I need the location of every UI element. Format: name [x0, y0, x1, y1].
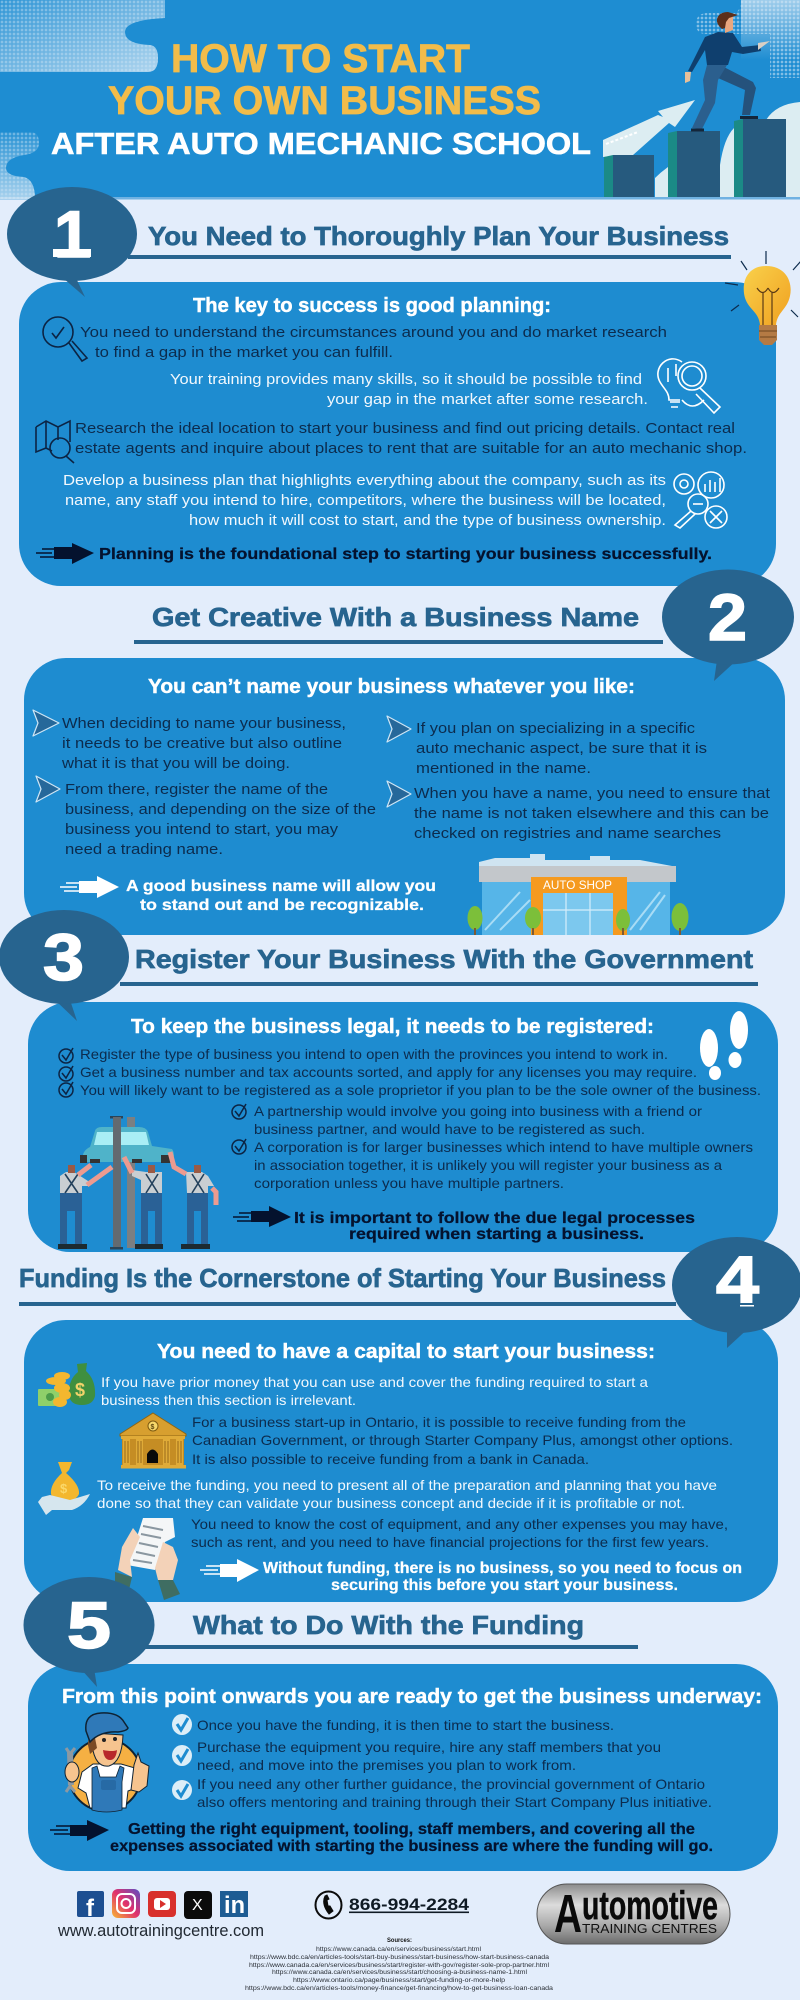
text: corporation: in association together, it is unlikely you will register your business as a	[254, 1157, 722, 1173]
icon: money pile	[38, 1363, 95, 1407]
checklist: Register the type of business you intend to open with the provinces you intend to work in.	[80, 1046, 668, 1062]
section heading 2	[134, 602, 663, 644]
text: present planning: done so that they can validate your business concept and decide if it is profitable or not.	[97, 1495, 685, 1511]
check list: also offers mentoring and training through their Start Company Plus initiative.	[197, 1794, 712, 1810]
text: name searches: the name is not taken elsewhere and this can be	[414, 805, 769, 822]
icon: linkedin: in	[224, 1892, 245, 1919]
text: specializing: auto mechanic aspect, be sure that it is	[416, 740, 707, 757]
section heading 4	[19, 1263, 676, 1306]
icon: map with magnifier	[36, 421, 74, 463]
check list	[197, 1717, 712, 1810]
icon: footprints	[700, 1011, 748, 1080]
text: prior money	[101, 1374, 648, 1408]
sources: Sources:	[387, 1937, 412, 1944]
section 3	[0, 910, 778, 1252]
section heading 4: Funding Is the Cornerstone of Starting Your Business	[19, 1263, 666, 1293]
text: cost of equipment: such as rent, and you need to have financial projections for the first few years.	[191, 1534, 709, 1550]
number bubble 4	[672, 1237, 800, 1348]
check list: need, and move into the premises you plan to work from.	[197, 1757, 576, 1773]
number bubble 2: 2	[708, 580, 747, 654]
logo: Automotive Training Centres	[537, 1884, 730, 1944]
takeaway: securing this before you start your business.	[331, 1577, 678, 1594]
social icons	[77, 1889, 248, 1922]
icon: money pile: $	[75, 1380, 85, 1400]
text: register the name	[65, 781, 376, 858]
text: location: Research the ideal location to start your business and find out pricing details. Contact real	[75, 420, 735, 437]
sources: https://www.bdc.ca/en/articles-tools/money-finance/get-financing/how-to-get-business-loan-canada	[245, 1985, 553, 1992]
text: training: your gap in the market after some research.	[327, 391, 648, 408]
title: HOW TO START	[171, 37, 470, 81]
sources: https://www.canada.ca/en/services/business/start/register-with-gov/register-sole-prop-partner.html	[249, 1962, 550, 1969]
takeaway	[263, 1560, 742, 1594]
illustration: man climbing bar chart	[603, 12, 800, 197]
text: present planning	[97, 1477, 717, 1511]
icon: facebook: f	[86, 1895, 95, 1922]
phone: 866-994-2284	[349, 1895, 470, 1914]
checklist	[80, 1046, 761, 1098]
text: cost of equipment	[191, 1516, 728, 1550]
icon: chevron bullets	[33, 710, 411, 807]
icon: phone	[316, 1892, 342, 1918]
panel 4	[24, 1320, 778, 1602]
panel 3	[28, 1002, 778, 1252]
illustration: auto shop	[468, 854, 688, 935]
footer	[57, 1884, 730, 1992]
text: specializing: mentioned in the name.	[416, 760, 591, 777]
number bubble 5	[24, 1577, 154, 1687]
takeaway	[126, 878, 436, 914]
title: AFTER AUTO MECHANIC SCHOOL	[51, 126, 591, 161]
icon: magnifier with check	[43, 317, 87, 361]
illustration: mechanics under lifted car	[58, 1116, 216, 1250]
text: business plan	[63, 472, 666, 529]
text: business plan: name, any staff you intend to hire, competitors, where the business will be located,	[65, 492, 666, 509]
text: partnership	[254, 1103, 702, 1137]
text: cost of equipment: You need to know the cost of equipment, and any other expenses you may have,	[191, 1516, 728, 1532]
panel heading: You need to have a capital to start your business:	[157, 1341, 655, 1363]
text: specializing	[416, 720, 707, 777]
icon: facebook	[77, 1891, 104, 1922]
section 4	[19, 1237, 800, 1602]
check list: Once you have the funding, it is then time to start the business.	[197, 1717, 614, 1733]
title	[51, 37, 591, 161]
text: Ontario funding: Canadian Government, or through Starter Company Plus, amongst other options.	[192, 1432, 733, 1448]
text: be creative: it needs to be creative but also outline	[62, 735, 342, 752]
takeaway: to stand out and be recognizable.	[140, 897, 424, 914]
icon: analytics cluster	[674, 472, 727, 528]
text: training	[170, 371, 648, 408]
sources: https://www.canada.ca/en/services/business/start/choosing-a-business-name-1.html	[272, 1969, 528, 1976]
takeaway: Planning is the foundational step to starting your business successfully.	[99, 546, 712, 563]
text: register the name: business, and depending on the size of the	[65, 801, 376, 818]
number bubble 3: 3	[43, 920, 84, 994]
sources	[245, 1937, 553, 1992]
number bubble 3	[0, 910, 129, 1021]
checklist: You will likely want to be registered as a sole proprietor if you plan to be the sole owner of the business.	[80, 1082, 761, 1098]
logo: Automotive Training Centres: TRAINING CENTRES	[582, 1921, 717, 1936]
panel heading: You can’t name your business whatever you like:	[148, 676, 635, 698]
section heading 3: Register Your Business With the Government	[135, 944, 753, 974]
text: present planning: To receive the funding, you need to present all of the preparation and planning that you have	[97, 1477, 717, 1493]
text: market research: to find a gap in the market you can fulfill.	[95, 344, 393, 361]
icon: black speed arrow	[233, 1206, 291, 1227]
takeaway: It is important to follow the due legal processes	[294, 1210, 695, 1227]
text: Ontario funding	[192, 1414, 733, 1467]
text: register the name: business you intend to start, you may	[65, 821, 339, 838]
illustration: cheerful mechanic	[65, 1713, 149, 1812]
check list: If you need any other further guidance, the provincial government of Ontario	[197, 1776, 705, 1792]
takeaway: A good business name will allow you	[126, 878, 436, 895]
takeaway: required when starting a business.	[349, 1226, 644, 1243]
checklist: Get a business number and tax accounts sorted, and apply for any licenses you may require.	[80, 1064, 697, 1080]
text: prior money: If you have prior money that you can use and cover the funding required to start a	[101, 1374, 648, 1390]
icon: black speed arrow	[36, 543, 94, 564]
icon: money bag in hand: $	[60, 1481, 68, 1496]
sources: https://www.canada.ca/en/services/business/start.html	[316, 1946, 482, 1953]
text: prior money: business then this section is irrelevant.	[101, 1392, 356, 1408]
icon: bank building	[120, 1413, 186, 1468]
panel heading: The key to success is good planning:	[193, 295, 551, 317]
number bubble 1	[7, 187, 137, 297]
icon: black speed arrow	[50, 1820, 109, 1841]
illustration: auto shop: AUTO SHOP	[543, 878, 612, 892]
sources: https://www.ontario.ca/page/business/start/get-funding-or-more-help	[293, 1977, 505, 1984]
text: corporation: A corporation is for larger businesses which intend to have multiple owners	[254, 1139, 753, 1155]
text: market research	[80, 324, 667, 361]
text: corporation: corporation unless you have multiple partners.	[254, 1175, 564, 1191]
section heading 1: You Need to Thoroughly Plan Your Business	[148, 221, 729, 251]
icon: white speed arrow	[60, 876, 119, 898]
icon: bank building: $	[150, 1424, 154, 1431]
logo: Automotive Training Centres: utomotive	[582, 1884, 718, 1928]
icon: X: X	[192, 1897, 203, 1914]
icon: glowing light bulb	[725, 251, 800, 345]
text: name searches	[414, 785, 771, 842]
number bubble 5: 5	[67, 1588, 111, 1662]
takeaway: Getting the right equipment, tooling, staff members, and covering all the	[128, 1821, 695, 1838]
section heading 2: Get Creative With a Business Name	[152, 602, 639, 632]
takeaway	[110, 1821, 713, 1855]
text: Ontario funding: For a business start-up in Ontario, it is possible to receive funding from the	[192, 1414, 686, 1430]
text: Ontario funding: It is also possible to receive funding from a bank in Canada.	[192, 1451, 589, 1467]
icon: instagram	[112, 1889, 140, 1918]
phone	[316, 1892, 470, 1918]
section heading 5	[145, 1610, 638, 1649]
number bubble 4: 4	[716, 1242, 759, 1316]
sources: https://www.bdc.ca/en/articles-tools/start-buy-business/start-business/how-start-business-canada	[250, 1954, 549, 1961]
text: location	[75, 420, 747, 457]
icon: youtube	[148, 1891, 176, 1917]
website: www.autotrainingcentre.com	[57, 1921, 264, 1940]
section 1	[7, 187, 800, 586]
section 5	[24, 1577, 778, 1871]
text: partnership: business partner, and would have to be registered as such.	[254, 1121, 645, 1137]
section heading 3	[120, 944, 758, 986]
text: business plan: how much it will cost to start, and the type of business ownership.	[189, 512, 666, 529]
panel 5	[28, 1664, 778, 1871]
number bubble 2	[662, 570, 794, 681]
text: partnership: A partnership would involve you going into business with a friend or	[254, 1103, 702, 1119]
text: corporation	[254, 1139, 753, 1191]
takeaway: Without funding, there is no business, so you need to focus on	[263, 1560, 742, 1577]
text: register the name: need a trading name.	[65, 841, 223, 858]
icon: money bag in hand	[38, 1462, 90, 1515]
text: training: Your training provides many skills, so it should be possible to find	[170, 371, 642, 388]
text: name searches: When you have a name, you need to ensure that	[414, 785, 771, 802]
text: location: estate agents and inquire about places to rent that are suitable for an auto mechanic shop.	[75, 440, 747, 457]
text: be creative: When deciding to name your business,	[62, 715, 346, 732]
panel 1	[19, 282, 776, 586]
header banner	[0, 0, 800, 200]
section heading 5: What to Do With the Funding	[193, 1610, 584, 1640]
icon: X	[184, 1891, 212, 1919]
icon: white speed arrow	[200, 1559, 259, 1582]
text: business plan: Develop a business plan that highlights everything about the company, such as its	[63, 472, 666, 489]
halftone clouds	[0, 0, 800, 199]
text: name searches: checked on registries and name searches	[414, 825, 721, 842]
section 2	[24, 570, 794, 935]
text: specializing: If you plan on specializing in a specific	[416, 720, 696, 737]
number bubble 1: 1	[54, 197, 91, 271]
text: be creative	[61, 715, 346, 772]
text: be creative: what it is that you will be doing.	[61, 755, 290, 772]
panel heading: From this point onwards you are ready to get the business underway:	[62, 1686, 762, 1708]
panel 2	[24, 658, 785, 935]
check list: Purchase the equipment you require, hire any staff members that you	[197, 1739, 661, 1755]
text: market research: You need to understand the circumstances around you and do market research	[80, 324, 667, 341]
panel heading: To keep the business legal, it needs to be registered:	[131, 1016, 654, 1038]
takeaway	[294, 1210, 695, 1243]
text: register the name: From there, register the name of the	[65, 781, 328, 798]
icon: check marks	[59, 1048, 246, 1154]
logo: Automotive Training Centres: A	[554, 1884, 582, 1944]
icon: check circles	[172, 1714, 192, 1800]
icon: bulb and magnifier	[658, 359, 720, 413]
takeaway: expenses associated with starting the business are where the funding will go.	[110, 1838, 713, 1855]
illustration: hands holding receipt	[115, 1518, 180, 1600]
title: YOUR OWN BUSINESS	[108, 79, 541, 123]
